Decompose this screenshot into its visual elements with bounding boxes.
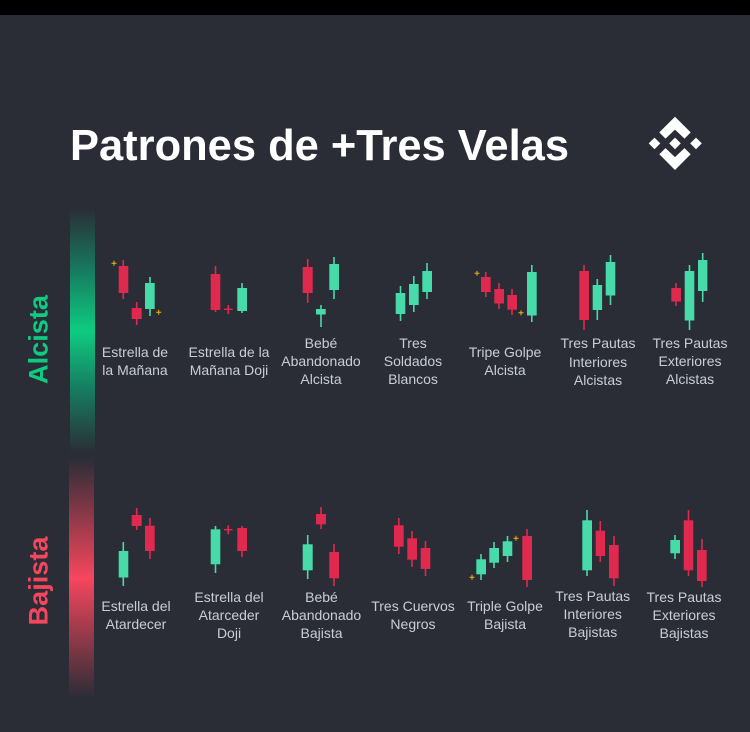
pattern: Tres Cuervos Negros: Tres Cuervos: [371, 598, 455, 614]
label: Alcista: Alcista: [24, 294, 54, 384]
pattern: Tripe Golpe Alcista: Alcista: [484, 362, 526, 378]
pattern: Tres Soldados Blancos: Tres: [399, 335, 427, 351]
pattern: Bebé Abandonado Bajista: Bebé: [305, 589, 338, 605]
pattern: Triple Golpe Bajista: [467, 529, 543, 632]
pattern: Estrella del Atarceder Doji: Atarceder: [199, 607, 260, 623]
pattern: Tres Pautas Interiores Alcistas: Alcistas: [574, 372, 622, 388]
pattern: Tres Pautas Exteriores Alcistas: [653, 253, 727, 387]
pattern: Tres Cuervos Negros: [371, 518, 455, 632]
pattern: Estrella del Atardecer: Estrella del: [101, 598, 171, 614]
pattern: Estrella del Atarceder Doji: Estrella del: [194, 589, 264, 605]
pattern: Estrella del Atardecer: [101, 508, 171, 632]
pattern: Tres Pautas Interiores Alcistas: Tres Pautas: [561, 335, 635, 351]
pattern: Estrella de la Mañana Doji: Mañana Doji: [190, 362, 268, 378]
gradient bar: bullish: [70, 208, 95, 453]
pattern: Tres Soldados Blancos: [384, 263, 442, 387]
pattern: Tres Pautas Exteriores Bajistas: Exteriores: [652, 607, 716, 623]
pattern: Estrella del Atarceder Doji: Doji: [217, 625, 241, 641]
pattern: Bebé Abandonado Alcista: [281, 257, 361, 387]
pattern: Triple Golpe Bajista: Triple Golpe: [467, 598, 543, 614]
pattern: Tres Soldados Blancos: Soldados: [384, 353, 442, 369]
pattern: Bebé Abandonado Alcista: Abandonado: [281, 353, 361, 369]
pattern: Bebé Abandonado Alcista: Bebé: [305, 335, 338, 351]
icon: Binance logo: [649, 117, 702, 170]
pattern: Bebé Abandonado Bajista: Abandonado: [282, 607, 361, 623]
pattern: Tres Pautas Interiores Alcistas: [561, 255, 635, 388]
pattern: Estrella de la Mañana Doji: Estrella de la: [189, 344, 270, 360]
pattern: Tripe Golpe Alcista: [469, 265, 542, 378]
gradient bar: bearish: [69, 458, 94, 698]
pattern: Estrella de la Mañana: Estrella de: [102, 344, 168, 360]
pattern: Tres Pautas Interiores Bajistas: Tres Pautas: [555, 588, 630, 604]
pattern: Tres Pautas Exteriores Bajistas: Tres Pautas: [647, 589, 721, 605]
pattern: Tres Pautas Interiores Bajistas: [555, 510, 630, 640]
pattern: Bebé Abandonado Alcista: Alcista: [300, 371, 342, 387]
pattern: Bebé Abandonado Bajista: Bajista: [300, 625, 343, 641]
pattern: Estrella de la Mañana Doji: [189, 266, 270, 378]
pattern: Tripe Golpe Alcista: Tripe Golpe: [469, 344, 542, 360]
pattern: Tres Pautas Exteriores Bajistas: Bajistas: [659, 625, 709, 641]
pattern: Estrella del Atardecer: Atardecer: [106, 616, 167, 632]
pattern: Estrella de la Mañana: [102, 260, 168, 378]
pattern: Tres Cuervos Negros: Negros: [390, 616, 436, 632]
pattern: Tres Soldados Blancos: Blancos: [388, 371, 438, 387]
title: Patrones de +Tres Velas: [70, 121, 569, 170]
pattern: Tres Pautas Interiores Bajistas: Interiores: [564, 606, 622, 622]
pattern: Tres Pautas Exteriores Alcistas: Alcistas: [666, 371, 714, 387]
label: Bajista: Bajista: [24, 536, 54, 626]
pattern: Tres Pautas Exteriores Bajistas: [647, 510, 721, 641]
pattern: Tres Pautas Exteriores Alcistas: Exteriores: [658, 353, 722, 369]
pattern: Tres Pautas Interiores Alcistas: Interiores: [569, 354, 627, 370]
pattern: Bebé Abandonado Bajista: [282, 507, 361, 641]
pattern: Estrella de la Mañana: la Mañana: [102, 362, 168, 378]
pattern: Tres Pautas Exteriores Alcistas: Tres Pautas: [653, 335, 727, 351]
pattern: Triple Golpe Bajista: Bajista: [484, 616, 526, 632]
pattern: Tres Pautas Interiores Bajistas: Bajistas: [568, 624, 617, 640]
pattern: Estrella del Atarceder Doji: [194, 525, 264, 641]
